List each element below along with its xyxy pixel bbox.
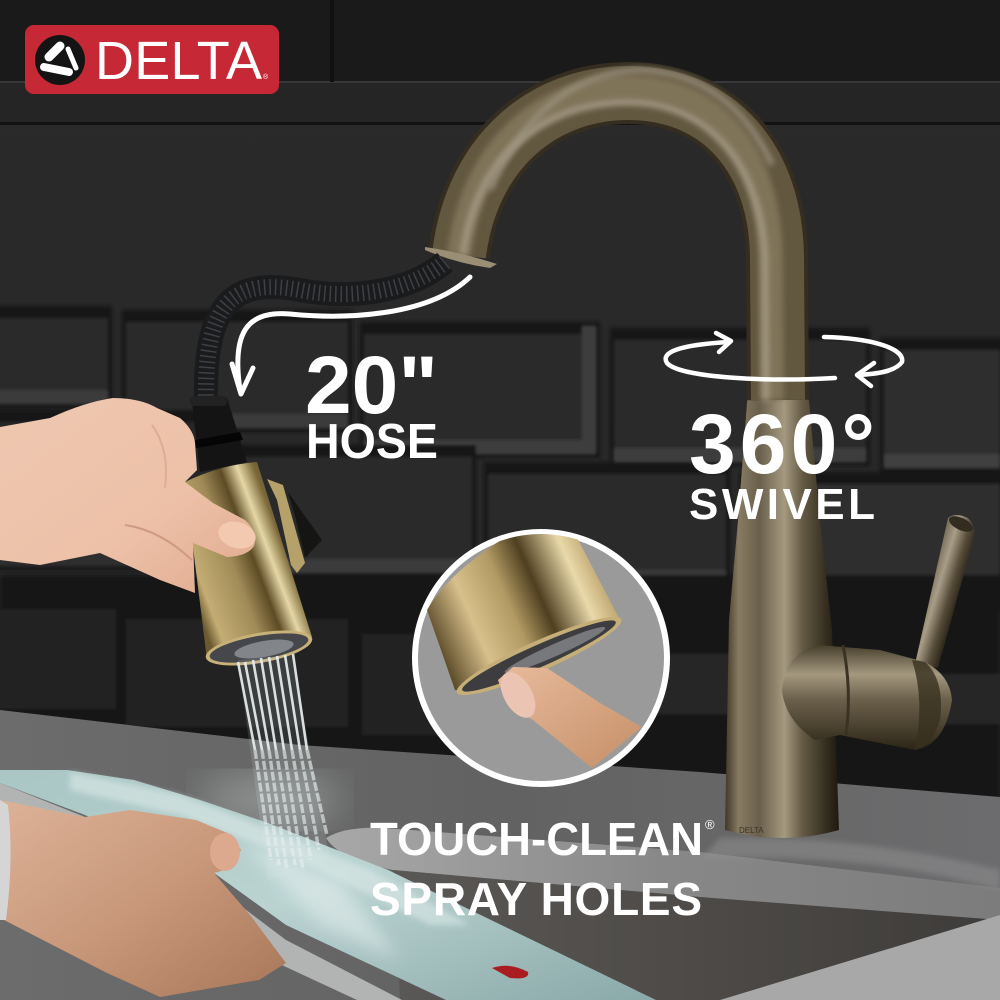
inset spray head bbox=[427, 530, 620, 692]
upper cabinet band bbox=[0, 0, 1000, 125]
hose connector bbox=[190, 396, 247, 472]
swivel label: SWIVEL bbox=[689, 480, 875, 529]
upper hand bbox=[0, 398, 259, 593]
faucet handle bbox=[782, 645, 952, 750]
hose arrow bbox=[232, 277, 470, 394]
subway tiles bbox=[0, 306, 1000, 805]
braided hose bbox=[206, 262, 445, 402]
lower hand bbox=[0, 800, 286, 997]
touch-clean label: ® bbox=[705, 817, 715, 832]
hose label bbox=[305, 340, 438, 469]
swivel label: 360° bbox=[689, 397, 875, 491]
thumbnail bbox=[215, 518, 259, 552]
hose label: 20" bbox=[305, 340, 438, 431]
faucet column bbox=[725, 390, 839, 838]
spray head bbox=[185, 462, 322, 672]
counter and sink bbox=[0, 710, 1000, 1000]
inset finger bbox=[498, 667, 642, 768]
touch-clean label: TOUCH-CLEAN bbox=[370, 813, 703, 865]
faucet engraved brand: DELTA bbox=[739, 826, 764, 835]
faucet spout arc bbox=[459, 70, 778, 400]
touch-clean label bbox=[370, 813, 715, 925]
Delta logo badge bbox=[25, 25, 279, 94]
swivel arrows bbox=[666, 333, 902, 386]
faucet spout tip bbox=[425, 247, 497, 268]
faucet bbox=[425, 70, 975, 838]
touch-clean label: SPRAY HOLES bbox=[370, 873, 702, 925]
faucet lever bbox=[915, 515, 974, 668]
hose label: HOSE bbox=[306, 415, 438, 469]
water spray bbox=[238, 654, 330, 880]
plate bbox=[0, 770, 656, 1000]
inset circle: touch-clean spray holes bbox=[415, 530, 667, 784]
Delta logo badge: DELTA bbox=[95, 31, 262, 91]
Delta logo badge: ® bbox=[263, 73, 269, 81]
